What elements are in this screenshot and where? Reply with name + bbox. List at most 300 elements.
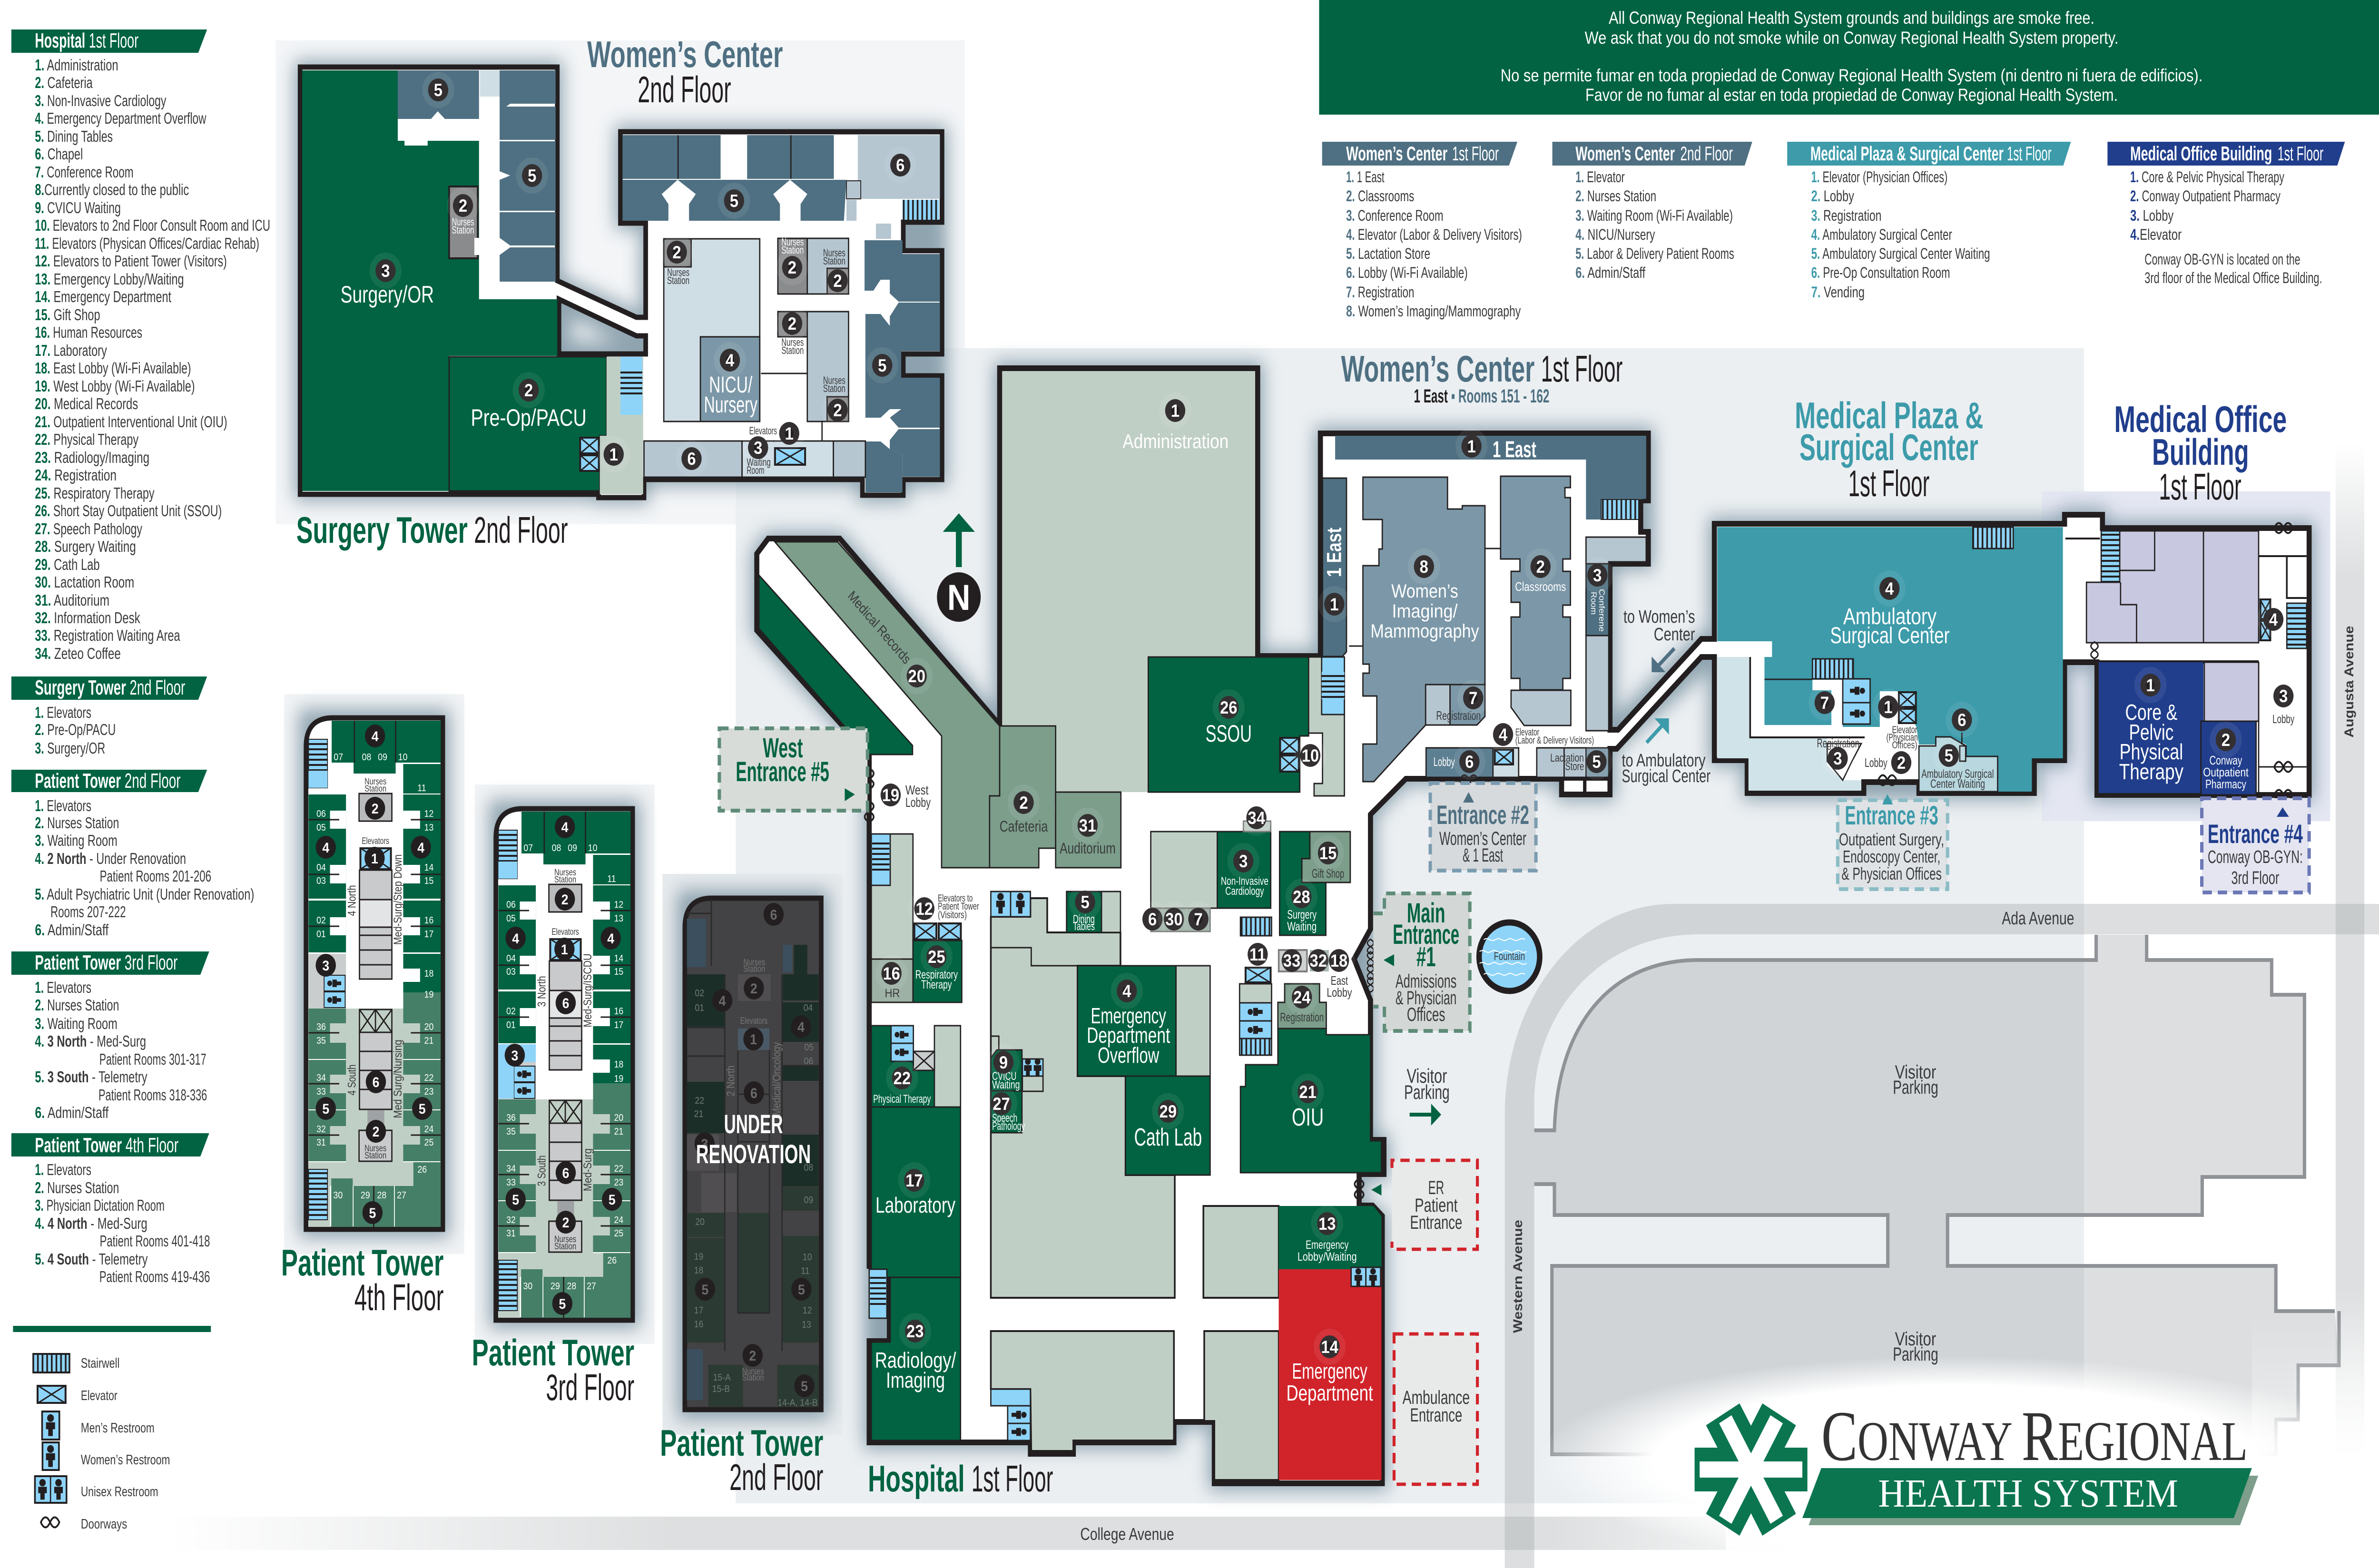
legend: surgery tower 2nd floor: 1. Elevators bbox=[35, 704, 91, 721]
tower 3 markers: 4 bbox=[512, 931, 519, 947]
list: Medical Office Building: Conway OB-GYN is located on the bbox=[2144, 251, 2300, 268]
tower 3 room numbers: 31 bbox=[506, 1228, 516, 1239]
hospital room labels: Department bbox=[1286, 1382, 1373, 1406]
callout: Entrance 2: Entrance #2 bbox=[1436, 800, 1529, 830]
tower 4 room numbers: 34 bbox=[316, 1073, 326, 1083]
tower 3 room numbers: 12 bbox=[614, 900, 623, 910]
callout: Entrance 4 bbox=[2202, 798, 2309, 892]
callout: Entrance 4: Conway OB-GYN: bbox=[2208, 847, 2303, 867]
women's center labels bbox=[1323, 437, 1606, 773]
legend: patient tower 2nd floor: 2. Nurses Station bbox=[35, 814, 119, 832]
panel: patient tower 2 background bbox=[662, 874, 842, 1435]
list: Women's Center 1st Floor: 3. Conference Room bbox=[1346, 207, 1443, 224]
hospital markers: 28 bbox=[1293, 887, 1310, 907]
callout: Entrance 3: & Physician Offices bbox=[1841, 864, 1942, 883]
women's center north rooms bbox=[622, 135, 834, 179]
hospital room labels: HR bbox=[885, 987, 900, 1000]
tower 2 room numbers: 22 bbox=[695, 1096, 704, 1106]
legend: hospital 1st floor: 21. Outpatient Interventional Unit (OIU) bbox=[35, 413, 227, 431]
tower 4 labels bbox=[362, 776, 389, 1160]
legend: symbols: Unisex Restroom bbox=[81, 1484, 158, 1499]
tower 3 wing labels: Med-Surg bbox=[581, 1148, 594, 1191]
hospital room labels: Dining bbox=[1073, 912, 1095, 925]
smoke free banner: We ask that you do not smoke while on Conway Regional Health System property. bbox=[1585, 28, 2118, 48]
parking lots bbox=[1534, 935, 2339, 1454]
tower 3 labels: Station bbox=[554, 1241, 576, 1251]
surgical center markers: 6 bbox=[1957, 710, 1966, 730]
list: Women's Center 1st Floor: 1st Floor bbox=[1452, 143, 1499, 165]
women's center markers: 2 bbox=[1536, 557, 1545, 577]
tower 2 markers: 6 bbox=[750, 1086, 757, 1101]
central block bbox=[991, 898, 1175, 1298]
heading: Women's Center 2nd Floor: 2nd Floor bbox=[638, 69, 731, 110]
panel: patient tower 3 background bbox=[475, 784, 655, 1344]
markers and labels: 2nd floor: 1 bbox=[785, 424, 794, 443]
list: Medical Plaza and Surgical Center: 7. Vending bbox=[1811, 284, 1865, 301]
hospital room labels: Gift Shop bbox=[1312, 867, 1344, 881]
tower 2 markers: 4 bbox=[719, 993, 726, 1009]
legend: hospital 1st floor: 7. Conference Room bbox=[35, 163, 133, 181]
women's center markers: 1 bbox=[1467, 437, 1476, 456]
hospital markers: 31 bbox=[1079, 816, 1096, 835]
tower 3 labels: Nurses bbox=[554, 867, 576, 877]
tower 3 markers: 4 bbox=[561, 820, 569, 835]
tower 4 room numbers: 15 bbox=[424, 876, 433, 886]
tower 2 room numbers: 18 bbox=[694, 1265, 703, 1276]
callout: West Entrance 5: West bbox=[763, 732, 803, 764]
room: CVICU waiting bbox=[991, 1050, 1022, 1091]
callout: Entrance 3 bbox=[1838, 794, 1947, 889]
surgical center labels: Offices) bbox=[1892, 740, 1917, 751]
legend: patient tower 2nd floor: Patient Tower 2nd Floor bbox=[35, 769, 181, 793]
tower 4 markers: 5 bbox=[322, 1101, 329, 1117]
panel: main site background bbox=[736, 348, 2084, 1503]
hospital markers: 22 bbox=[894, 1068, 911, 1088]
women's center markers bbox=[1324, 435, 1607, 773]
legend: hospital 1st floor: 8.Currently closed to the public bbox=[35, 181, 189, 198]
room: lobby bbox=[1426, 748, 1493, 777]
hospital room labels: Imaging bbox=[886, 1369, 945, 1393]
room: Surgery/OR bbox=[302, 70, 557, 491]
legend: hospital 1st floor bbox=[11, 29, 270, 662]
markers and labels: 2nd floor: 2 bbox=[788, 314, 796, 333]
list: Medical Plaza and Surgical Center: 3. Registration bbox=[1811, 207, 1881, 224]
hospital room labels: Cardiology bbox=[1225, 884, 1264, 897]
tower 4 room numbers: 29 bbox=[361, 1190, 370, 1201]
tower 4 markers bbox=[315, 725, 433, 1224]
tower 2 room numbers: 09 bbox=[804, 1195, 813, 1205]
surgical center markers: 7 bbox=[1820, 693, 1829, 713]
hospital room labels: Medical Records bbox=[845, 588, 914, 667]
tower 2 room numbers: 21 bbox=[694, 1109, 703, 1119]
hospital markers: 24 bbox=[1293, 988, 1311, 1007]
markers and labels: 2nd floor: Station bbox=[667, 275, 689, 286]
legend: patient tower 4th floor: Patient Rooms 401-418 bbox=[100, 1232, 210, 1250]
tower 3 room numbers: 27 bbox=[587, 1281, 596, 1292]
heading: Patient Tower 2nd Floor: Patient Tower bbox=[660, 1422, 823, 1464]
heading: Surgery Tower 2nd Floor: 2nd Floor bbox=[474, 509, 568, 551]
women's center labels: Imaging/ bbox=[1392, 601, 1458, 622]
tower 4 room numbers: 01 bbox=[316, 929, 326, 940]
women's center labels: Store bbox=[1565, 760, 1584, 773]
tower 4 labels: Station bbox=[364, 1150, 386, 1160]
east blocks bbox=[1203, 1206, 1279, 1298]
tower 3 room numbers: 08 bbox=[552, 843, 561, 853]
callout: Entrance 2 bbox=[1430, 783, 1536, 871]
panel: Ambulatory Surgical Center bbox=[1717, 527, 2063, 792]
under renovation label: RENOVATION bbox=[696, 1139, 811, 1169]
building shadows bbox=[300, 67, 2309, 1483]
panel: Patient Tower 2nd Floor under renovation bbox=[685, 898, 821, 1410]
tower 4 labels: Elevators bbox=[362, 836, 389, 846]
tower 3 room numbers: 34 bbox=[506, 1164, 516, 1174]
surgical center labels: (Physician bbox=[1887, 732, 1918, 743]
hospital markers: 10 bbox=[1302, 746, 1319, 765]
west wing dark room bbox=[759, 575, 913, 755]
road: College Avenue bbox=[170, 1517, 1854, 1550]
list: Medical Plaza and Surgical Center: 5. Ambulatory Surgical Center Waiting bbox=[1811, 245, 1990, 262]
hospital room labels: (Visitors) bbox=[938, 910, 967, 921]
list: Women's Center 1st Floor: 4. Elevator (Labor & Delivery Visitors) bbox=[1346, 226, 1522, 243]
surgical center labels bbox=[1817, 604, 1994, 791]
doors bbox=[865, 768, 1374, 1200]
tower 3 room numbers: 25 bbox=[614, 1228, 623, 1239]
hospital markers: 7 bbox=[1194, 910, 1203, 929]
hospital room labels: Waiting bbox=[992, 1078, 1020, 1091]
hospital room labels: Cath Lab bbox=[1134, 1124, 1202, 1151]
tower 4 markers: 2 bbox=[372, 801, 379, 817]
markers and labels: 2nd floor: Nurses bbox=[781, 236, 804, 248]
markers and labels: 2nd floor: Surgery/OR bbox=[341, 282, 434, 308]
tower 3 room numbers: 09 bbox=[568, 843, 577, 853]
tower 3 labels bbox=[551, 867, 579, 1251]
tower 4 room numbers: 33 bbox=[316, 1087, 326, 1097]
hospital markers: 2 bbox=[1019, 793, 1028, 813]
tower 3 room numbers: 15 bbox=[614, 967, 623, 977]
tower 3 room numbers: 28 bbox=[567, 1281, 576, 1292]
light corridor room bbox=[1717, 657, 1861, 791]
legend: hospital 1st floor: 30. Lactation Room bbox=[35, 573, 134, 591]
legend: hospital 1st floor: 2. Cafeteria bbox=[35, 74, 93, 91]
legend: surgery tower 2nd floor bbox=[11, 676, 207, 757]
tower 4 wing labels: Med Surg/Nursing bbox=[392, 1040, 404, 1118]
heading: Medical Plaza and Surgical Center: 1st Floor bbox=[1848, 462, 1929, 504]
hospital room labels: Lobby bbox=[1327, 986, 1352, 1000]
legend: patient tower 4th floor bbox=[11, 1133, 210, 1285]
stairs and restrooms bbox=[1973, 527, 2013, 549]
callout: ER Patient Entrance bbox=[1371, 1160, 1477, 1249]
east lobby stack bbox=[1245, 967, 1272, 983]
street labels: Visitor bbox=[1895, 1329, 1936, 1350]
heading: Medical Plaza and Surgical Center: Surgical Center bbox=[1799, 426, 1978, 468]
logo: Conway Regional Health System bbox=[1695, 1397, 2258, 1536]
room: cath lab bbox=[1126, 1076, 1210, 1175]
list: Women's Center 2nd Floor: Women’s Center bbox=[1575, 143, 1675, 165]
hospital room labels: Administration bbox=[1122, 431, 1229, 453]
tower 2 labels: Station bbox=[742, 1372, 764, 1382]
smoke free banner: Favor de no fumar al estar en toda propiedad de Conway Regional Health System. bbox=[1585, 85, 2118, 105]
legend: hospital 1st floor: 14. Emergency Department bbox=[35, 288, 171, 305]
hospital markers: 25 bbox=[928, 947, 945, 967]
callout: West Entrance 5: Entrance #5 bbox=[736, 756, 829, 787]
tower 2 room numbers: 14-A, 14-B bbox=[777, 1398, 818, 1408]
heading: Women's Center 1st Floor: 1 East ▪ Rooms 151 - 162 bbox=[1414, 386, 1549, 407]
markers and labels: 2nd floor: 5 bbox=[434, 80, 442, 100]
tower 2 markers: 2 bbox=[750, 981, 757, 997]
legend: patient tower 3rd floor: Patient Tower 3rd Floor bbox=[35, 951, 177, 974]
tower 2 room numbers: 05 bbox=[804, 1042, 814, 1053]
tower 3 room numbers: 06 bbox=[506, 900, 516, 910]
legend: hospital 1st floor: 19. West Lobby (Wi-Fi Available) bbox=[35, 377, 195, 395]
tower 2 markers: 1 bbox=[750, 1032, 757, 1048]
road: Ada and Western Avenue bbox=[1505, 904, 2379, 1568]
tower 3 room numbers: 30 bbox=[523, 1281, 532, 1292]
legend: patient tower 3rd floor: Patient Rooms 318-336 bbox=[98, 1086, 207, 1104]
legend: hospital 1st floor: 3. Non-Invasive Cardiology bbox=[35, 92, 167, 109]
hospital markers: 13 bbox=[1318, 1214, 1336, 1234]
hospital markers: 20 bbox=[908, 666, 925, 686]
women's center markers: 7 bbox=[1469, 688, 1477, 708]
arrow: to Women's Center: to Women’s bbox=[1623, 607, 1695, 627]
tower 4 room numbers: 30 bbox=[334, 1190, 343, 1201]
logo: Conway Regional Health System: HEALTH SYSTEM bbox=[1878, 1471, 2178, 1516]
tower 3 room numbers: 01 bbox=[506, 1020, 516, 1030]
legend: patient tower 2nd floor bbox=[11, 769, 254, 939]
markers and labels: 2nd floor: 2 bbox=[524, 381, 533, 400]
callout: Entrance 4: 3rd Floor bbox=[2231, 868, 2279, 888]
markers and labels: 2nd floor: Station bbox=[781, 245, 804, 256]
markers and labels: 2nd floor: Room bbox=[747, 465, 765, 476]
panel: Medical Office Building bbox=[2065, 523, 2307, 800]
women's center labels: 1 East bbox=[1323, 528, 1346, 577]
callout: Entrance 4: Entrance #4 bbox=[2208, 819, 2303, 849]
office building labels bbox=[2119, 701, 2294, 791]
legend: hospital 1st floor: 27. Speech Pathology bbox=[35, 520, 142, 538]
legend: hospital 1st floor: 13. Emergency Lobby/Waiting bbox=[35, 270, 184, 288]
tower 2 labels: 2 North bbox=[725, 1066, 737, 1096]
room: 1 East north bbox=[1335, 436, 1646, 519]
legend: patient tower 3rd floor: Patient Rooms 301-317 bbox=[99, 1050, 206, 1068]
legend: hospital 1st floor: 31. Auditorium bbox=[35, 591, 109, 609]
office building labels: Lobby bbox=[2272, 713, 2294, 726]
hospital markers: 14 bbox=[1321, 1337, 1338, 1357]
street labels: Ada Avenue bbox=[2002, 908, 2074, 928]
hospital room labels: Therapy bbox=[921, 979, 952, 991]
women's center markers: 4 bbox=[1499, 725, 1508, 745]
hospital markers: 32 bbox=[1309, 951, 1327, 970]
tower 3 wing labels bbox=[536, 953, 594, 1191]
tower 4 room numbers: 11 bbox=[417, 783, 426, 794]
markers and labels: 2nd floor: Nurses bbox=[823, 247, 845, 259]
room: radiology bbox=[871, 1277, 961, 1441]
hospital markers: 9 bbox=[999, 1053, 1008, 1072]
tower 2 room numbers: 17 bbox=[694, 1305, 703, 1316]
heading: Patient Tower 3rd Floor: 3rd Floor bbox=[546, 1366, 634, 1408]
women's center labels: Room bbox=[1589, 592, 1598, 615]
tower 3 room numbers: 04 bbox=[506, 953, 516, 964]
tower 4 markers: 1 bbox=[371, 851, 378, 867]
tower 4 room numbers: 31 bbox=[316, 1137, 326, 1148]
heading: Medical Office Building: Medical Office bbox=[2114, 398, 2287, 440]
callout: Main Entrance 1: Admissions bbox=[1396, 971, 1456, 992]
surgical center labels: Center Waiting bbox=[1930, 778, 1985, 791]
tower 2 room numbers: 08 bbox=[804, 1163, 813, 1173]
hospital room labels: Emergency bbox=[1091, 1004, 1166, 1029]
list: Women's Center 1st Floor: 7. Registration bbox=[1346, 284, 1414, 301]
hospital room labels: Overflow bbox=[1098, 1044, 1160, 1068]
markers and labels: 2nd floor: 2 bbox=[833, 271, 842, 291]
hospital room labels: Pathology bbox=[992, 1119, 1025, 1132]
north arrow bbox=[937, 513, 981, 622]
room: SSOU bbox=[1148, 657, 1308, 792]
markers and labels: 2nd floor: Nurses bbox=[667, 267, 689, 278]
list: Medical Plaza and Surgical Center: 6. Pre-Op Consultation Room bbox=[1811, 265, 1950, 281]
women's center labels: Registration bbox=[1436, 709, 1481, 723]
tower 4 markers: 6 bbox=[373, 1075, 379, 1090]
legend: hospital 1st floor: Hospital 1st Floor bbox=[35, 29, 138, 52]
room: medical records bbox=[775, 542, 1000, 868]
icon: fountain bbox=[1479, 922, 1540, 991]
heading: Women's Center 1st Floor: 1st Floor bbox=[1541, 348, 1622, 390]
tower 2 room numbers: 02 bbox=[695, 988, 704, 999]
tower 2 room numbers: 20 bbox=[695, 1217, 705, 1227]
markers and labels: 2nd floor: Waiting bbox=[747, 457, 771, 468]
legend: hospital 1st floor: 1. Administration bbox=[35, 56, 118, 74]
heading: Patient Tower 2nd Floor bbox=[660, 1422, 823, 1498]
hospital markers: 18 bbox=[1330, 951, 1347, 970]
legend: patient tower 4th floor: 4. 4 North - Med-Surg bbox=[35, 1215, 147, 1232]
women's center markers: 3 bbox=[1593, 566, 1602, 585]
patient rooms east bbox=[500, 70, 556, 282]
tower 4 room numbers: 10 bbox=[398, 752, 407, 763]
office building labels: Physical bbox=[2120, 740, 2183, 764]
heading: Patient Tower 2nd Floor: 2nd Floor bbox=[729, 1456, 823, 1498]
markers and labels: 2nd floor: 6 bbox=[896, 156, 904, 175]
room: registration bbox=[1425, 685, 1450, 725]
room: cafeteria bbox=[990, 726, 1062, 868]
markers and labels: 2nd floor: Station bbox=[823, 383, 845, 394]
legend: patient tower 2nd floor: 4. 2 North - Under Renovation bbox=[35, 850, 186, 867]
tower 3 room numbers: 18 bbox=[614, 1059, 623, 1070]
tower 3 room numbers: 16 bbox=[614, 1006, 623, 1017]
callout: ER Patient Entrance: Entrance bbox=[1410, 1212, 1462, 1234]
office building markers: 2 bbox=[2222, 730, 2230, 750]
tower 4 room numbers: 16 bbox=[424, 915, 433, 926]
hospital markers: 11 bbox=[1249, 945, 1266, 964]
panel: Patient Tower 4th Floor bbox=[306, 718, 443, 1229]
legend: symbols: Men’s Restroom bbox=[81, 1420, 155, 1435]
tower 3 markers: 2 bbox=[562, 1215, 569, 1231]
hospital room labels: SSOU bbox=[1206, 721, 1252, 747]
tower 4 markers: 5 bbox=[419, 1101, 426, 1117]
hospital room labels: Emergency bbox=[1292, 1360, 1367, 1384]
list: Women's Center 1st Floor: Women’s Center bbox=[1346, 143, 1447, 165]
callout: Entrance 3: Endoscopy Center, bbox=[1843, 847, 1940, 866]
markers and labels: 2nd floor: Station bbox=[781, 345, 804, 356]
tower 4 markers: 4 bbox=[372, 729, 379, 745]
hospital markers: 30 bbox=[1165, 910, 1182, 929]
road: Augusta Avenue bbox=[2336, 442, 2364, 1568]
legend: patient tower 2nd floor: 3. Waiting Room bbox=[35, 832, 118, 849]
logo: Conway Regional Health System: CONWAY REGIONAL bbox=[1821, 1397, 2248, 1476]
hospital room labels: West bbox=[905, 783, 929, 797]
surgical center labels: Lobby bbox=[1865, 756, 1887, 770]
tower 4 room numbers: 19 bbox=[424, 990, 433, 1000]
hospital room labels: Emergency bbox=[1306, 1239, 1349, 1252]
legend: patient tower 2nd floor: 5. Adult Psychiatric Unit (Under Renovation) bbox=[35, 885, 254, 903]
list: Women's Center 2nd Floor bbox=[1553, 142, 1752, 281]
strip and stair bbox=[600, 357, 643, 494]
surgery waiting and gift shop bbox=[1279, 832, 1326, 935]
non-invasive cardiology group bbox=[1151, 832, 1217, 908]
icon: fountain: Fountain bbox=[1494, 950, 1525, 962]
tower 4 wing labels: 4 South bbox=[346, 1065, 358, 1095]
legend: patient tower 2nd floor: Rooms 207-222 bbox=[50, 903, 126, 921]
list: Medical Office Building: 3rd floor of the Medical Office Building. bbox=[2144, 270, 2322, 286]
tower 4 labels: Station bbox=[364, 784, 386, 794]
legend: hospital 1st floor: 25. Respiratory Therapy bbox=[35, 484, 155, 502]
north arrow: N bbox=[947, 578, 970, 618]
room: administration bbox=[1002, 371, 1255, 792]
legend: hospital 1st floor: 22. Physical Therapy bbox=[35, 431, 138, 448]
tower 4 room numbers: 08 bbox=[362, 752, 371, 763]
hospital markers: 29 bbox=[1160, 1102, 1177, 1121]
callout: West Entrance 5 bbox=[719, 728, 867, 811]
legend: hospital 1st floor: 6. Chapel bbox=[35, 145, 83, 163]
legend: hospital 1st floor: 24. Registration bbox=[35, 466, 117, 484]
markers and labels: 2nd floor: Pre-Op/PACU bbox=[471, 405, 587, 431]
tower 3 room numbers: 10 bbox=[588, 843, 597, 853]
tower 4 room numbers: 25 bbox=[424, 1137, 433, 1148]
legend: hospital 1st floor: 15. Gift Shop bbox=[35, 306, 100, 323]
surgical center markers: 2 bbox=[1897, 753, 1906, 773]
legend: hospital 1st floor: 32. Information Desk bbox=[35, 609, 140, 627]
heading: Hospital 1st Floor bbox=[868, 1458, 1053, 1499]
legend: symbols bbox=[13, 1326, 211, 1531]
hospital room labels: Speech bbox=[992, 1111, 1017, 1124]
tower 4 room numbers: 14 bbox=[424, 862, 433, 873]
strip east of SSOU bbox=[1308, 657, 1345, 796]
tower 3 room numbers: 26 bbox=[607, 1255, 617, 1266]
tower 4 room numbers: 03 bbox=[316, 876, 326, 886]
legend: patient tower 2nd floor: 6. Admin/Staff bbox=[35, 921, 109, 939]
tower 4 room numbers: 20 bbox=[424, 1022, 433, 1032]
panel: medical office building background bbox=[2042, 491, 2330, 821]
street labels: Visitor bbox=[1895, 1062, 1936, 1083]
list: Medical Office Building: 2. Conway Outpatient Pharmacy bbox=[2130, 188, 2281, 205]
tower 3 room numbers: 02 bbox=[506, 1006, 516, 1017]
logo fade bbox=[1536, 1313, 2379, 1568]
tower 4 wing labels: Med-Surg/Step Down bbox=[392, 854, 404, 945]
markers and labels: 2nd floor: Elevators bbox=[749, 425, 777, 437]
hospital markers: 26 bbox=[1220, 698, 1237, 717]
heading: Medical Office Building bbox=[2114, 398, 2287, 508]
office building labels: Therapy bbox=[2119, 760, 2183, 784]
tower 4 room numbers: 27 bbox=[397, 1190, 406, 1201]
tower 4 room numbers: 04 bbox=[316, 862, 326, 873]
tower 2 room numbers: 15-B bbox=[712, 1384, 730, 1394]
office building labels: Outpatient bbox=[2203, 766, 2249, 779]
tower 3 room numbers: 19 bbox=[614, 1074, 623, 1084]
tower 2 room numbers: 12 bbox=[803, 1305, 812, 1316]
main building outline: hospital, women's center, surgical center, office building bbox=[757, 368, 2309, 1483]
legend: hospital 1st floor: 10. Elevators to 2nd Floor Consult Room and ICU bbox=[35, 216, 270, 234]
tower 2 room numbers: 15-A bbox=[713, 1372, 731, 1383]
tower 3 wing labels: 3 South bbox=[536, 1155, 548, 1186]
women's center labels: Lobby bbox=[1434, 755, 1455, 769]
legend: patient tower 4th floor: Patient Rooms 419-436 bbox=[99, 1268, 210, 1285]
tower 2 markers: 6 bbox=[770, 907, 777, 923]
